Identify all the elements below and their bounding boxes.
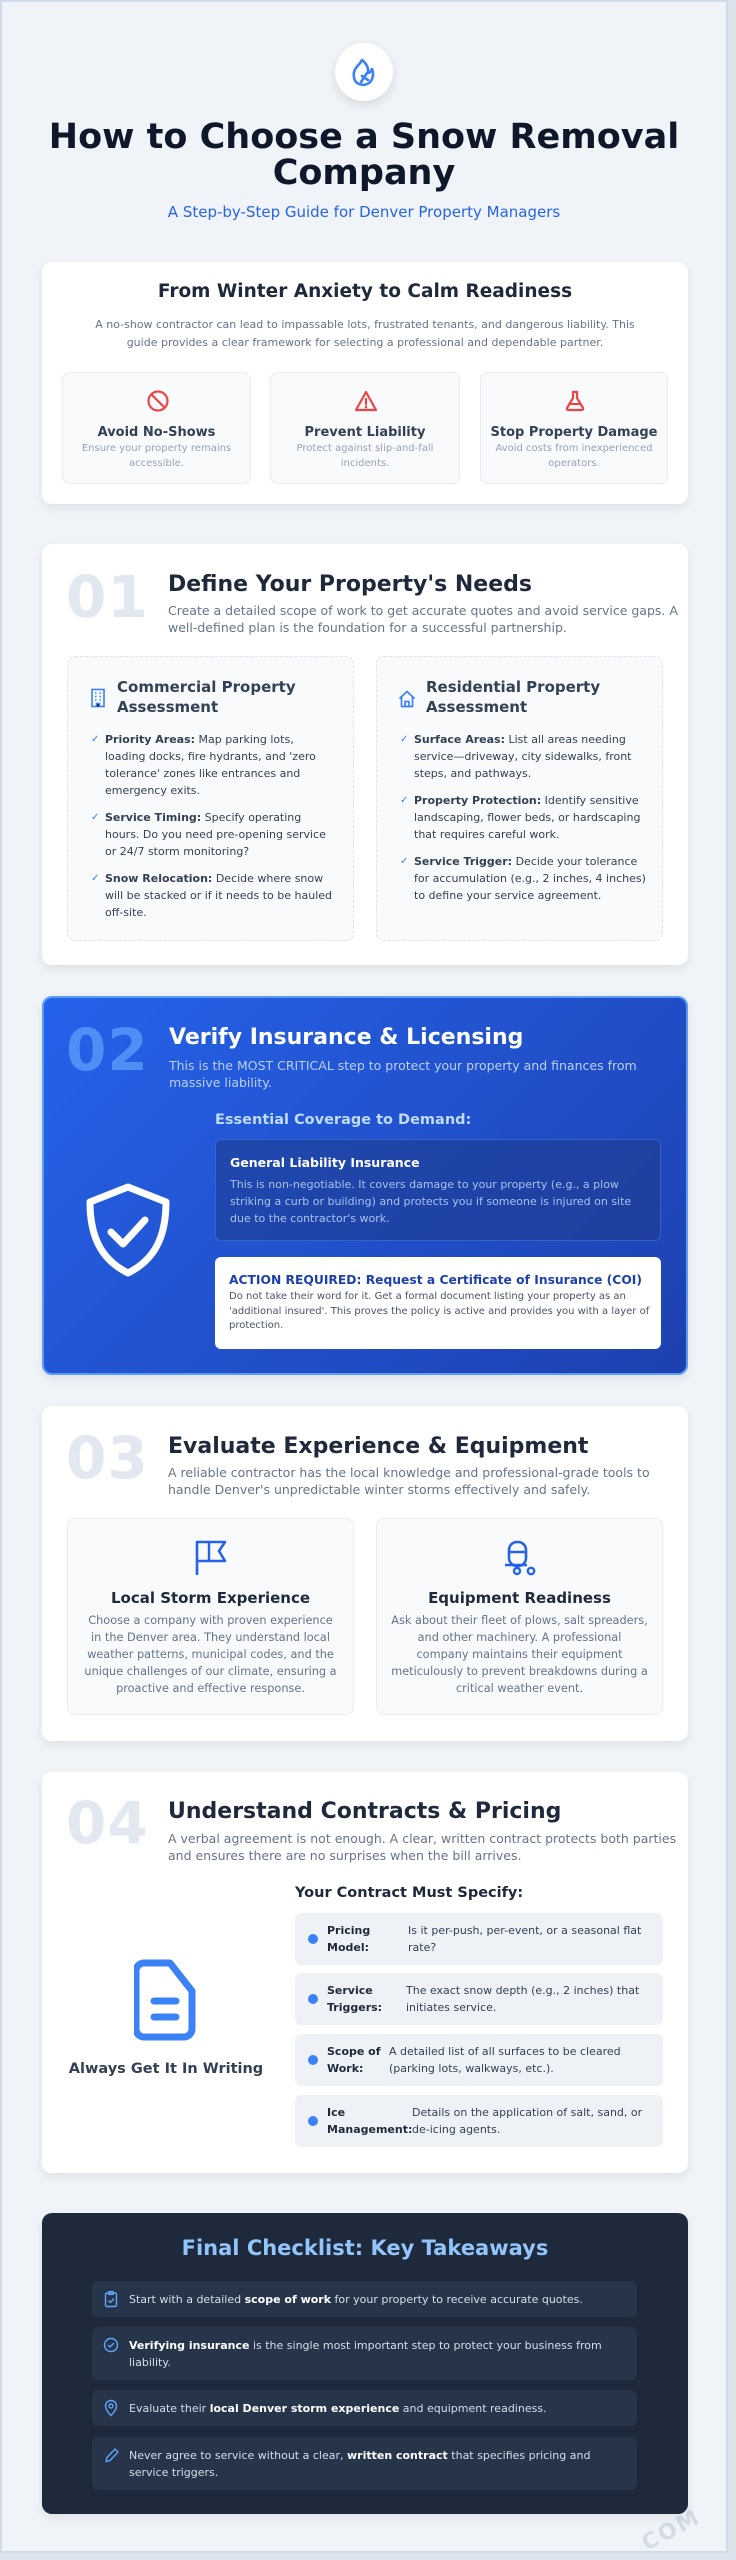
icon: snow plow xyxy=(505,1540,536,1576)
row: service triggers: The exact snow depth (e.g., 2 inches) that xyxy=(406,1984,639,1997)
card: equipment readiness: critical weather event. xyxy=(456,1682,583,1694)
row: pricing model xyxy=(295,1913,663,1965)
sub-panel: residential: service—driveway, city sidewalks, front xyxy=(414,750,632,762)
panel: step 02 xyxy=(42,996,688,1375)
row: pricing model: rate? xyxy=(408,1941,436,1954)
icon: ban xyxy=(147,390,169,412)
sub-panel: residential: ✓ xyxy=(400,856,408,866)
title: How to Choose a Snow Removal xyxy=(49,117,679,157)
label: always get it in writing: Always Get It In Writing xyxy=(69,2061,263,2077)
row: ice management xyxy=(295,2095,663,2147)
row: ice management: Details on the application of salt, sand, or xyxy=(412,2106,642,2119)
card: equipment readiness: and other machinery. A professional xyxy=(418,1630,621,1644)
mini card: no-shows: accessible. xyxy=(129,458,184,469)
takeaway 4: Never agree to service without a clear, written contract that specifies pricing and xyxy=(129,2448,590,2462)
sub-panel: commercial: ✓ xyxy=(91,812,99,822)
callout: action required: ACTION REQUIRED: Request a Certificate of Insurance (COI) xyxy=(229,1273,642,1287)
sub-panel: commercial: ✓ xyxy=(91,872,99,884)
mini card: damage xyxy=(480,372,668,484)
takeaway 4 xyxy=(92,2437,637,2490)
text: intro paragraph xyxy=(95,318,635,349)
icon: header logo xyxy=(335,43,393,101)
card: local storm experience: weather patterns, municipal codes, and the xyxy=(87,1648,334,1660)
subtitle: A Step-by-Step Guide for Denver Property Managers xyxy=(168,203,560,221)
row: service triggers: Triggers: xyxy=(327,2001,382,2014)
card: equipment readiness xyxy=(376,1518,663,1715)
sub-panel: residential xyxy=(376,656,663,941)
text: step 01 description: well-defined plan is the foundation for a successful partnership. xyxy=(168,620,567,635)
takeaway 4: service triggers. xyxy=(129,2466,218,2478)
sub-panel: residential: steps, and pathways. xyxy=(414,766,531,780)
row: scope of work: Scope of xyxy=(327,2045,381,2058)
card: local storm experience: in the Denver area. They understand local xyxy=(91,1630,330,1644)
text: step 01 description: Create a detailed scope of work to get accurate quotes and avoid service gaps. A xyxy=(168,603,678,618)
callout: action required: protection. xyxy=(229,1320,283,1331)
text: step 03 description xyxy=(168,1465,650,1497)
mini card: damage: Stop Property Damage xyxy=(491,425,657,440)
sub-panel: commercial: hours. Do you need pre-opening service xyxy=(105,828,326,840)
card: local storm experience: unique challenges of our climate, ensuring a xyxy=(84,1664,337,1678)
sub-panel: commercial xyxy=(67,656,354,941)
card: local storm experience: Local Storm Experience xyxy=(111,1589,310,1607)
panel: step 04 xyxy=(42,1772,688,2173)
sub-panel: commercial: loading docks, fire hydrants, and 'zero xyxy=(105,750,316,762)
card: equipment readiness: Equipment Readiness xyxy=(428,1589,611,1607)
icon: warning xyxy=(354,390,378,412)
heading: final checklist: Final Checklist: Key Takeaways xyxy=(182,2236,548,2260)
mini card: no-shows: Avoid No-Shows xyxy=(98,425,215,440)
icon: house xyxy=(399,690,415,708)
sub-panel: commercial: tolerance' zones like entrances and xyxy=(105,766,300,780)
sub-panel: residential: Property Protection: Identify sensitive xyxy=(414,794,639,806)
card: local storm experience: proactive and effective response. xyxy=(116,1682,305,1694)
sub-panel: residential: for accumulation (e.g., 2 inches, 4 inches) xyxy=(414,872,646,884)
sub-panel: commercial: Snow Relocation: Decide where snow xyxy=(105,872,323,884)
text: step 04 description xyxy=(168,1830,676,1862)
panel: final checklist xyxy=(42,2213,688,2514)
mini card: no-shows: Ensure your property remains xyxy=(82,443,231,454)
callout: general liability xyxy=(215,1139,661,1241)
text: step 04 description: and ensures there are no surprises when the bill arrives. xyxy=(168,1848,521,1862)
icon: document xyxy=(134,1960,196,2040)
takeaway 2: liability. xyxy=(129,2356,171,2368)
panel: step 01 xyxy=(42,544,688,965)
panel: step 03 xyxy=(42,1406,688,1741)
row: ice management: de-icing agents. xyxy=(412,2123,500,2136)
sub-panel: residential: Assessment xyxy=(426,698,527,716)
sub-panel: residential: that requires careful work. xyxy=(414,828,560,840)
number 01: 01 xyxy=(66,563,149,631)
mini card: liability: Protect against slip-and-fall xyxy=(297,443,433,454)
sub-panel: commercial: emergency exits. xyxy=(105,784,200,796)
takeaway 1: Start with a detailed scope of work for your property to receive accurate quotes. xyxy=(129,2292,583,2306)
icon: shield xyxy=(86,1184,170,1276)
sub-panel: commercial: will be stacked or if it needs to be hauled xyxy=(105,888,332,902)
card: equipment readiness: Ask about their fleet of plows, salt spreaders, xyxy=(391,1614,648,1626)
row: service triggers: initiates service. xyxy=(406,2001,496,2014)
text: intro paragraph: guide provides a clear framework for selecting a professional and dependable partner. xyxy=(127,336,603,349)
mini card: liability xyxy=(270,372,460,484)
row: pricing model: Model: xyxy=(327,1941,369,1954)
card: local storm experience xyxy=(67,1518,354,1715)
card: equipment readiness: company maintains their equipment xyxy=(416,1648,623,1660)
heading: essential coverage: Essential Coverage to Demand: xyxy=(215,1112,471,1128)
mini card: liability: incidents. xyxy=(341,458,389,469)
text: step 04 description: A verbal agreement is not enough. A clear, written contract protects both parties xyxy=(168,1830,676,1846)
heading 03: Evaluate Experience & Equipment xyxy=(168,1434,588,1459)
mini card: no-shows xyxy=(62,372,251,484)
heading: contract must specify: Your Contract Must Specify: xyxy=(295,1885,523,1901)
sub-panel: residential: ✓ xyxy=(400,794,408,806)
number 02: 02 xyxy=(66,1016,149,1084)
row: scope of work: A detailed list of all surfaces to be cleared xyxy=(389,2045,621,2058)
text: step 03 description: handle Denver's unpredictable winter storms effectively and safely. xyxy=(168,1482,590,1497)
text: step 03 description: A reliable contractor has the local knowledge and professional-grade tools to xyxy=(168,1465,650,1480)
callout: action required xyxy=(215,1257,661,1349)
row: scope of work: (parking lots, walkways, etc.). xyxy=(389,2062,554,2075)
title: Company xyxy=(273,153,455,193)
number 03: 03 xyxy=(66,1424,149,1492)
text: intro paragraph: A no-show contractor can lead to impassable lots, frustrated tenants, and dangerous liability. This xyxy=(95,318,635,331)
mini card: damage: Avoid costs from inexperienced xyxy=(495,443,653,454)
row: ice management: Management: xyxy=(327,2123,412,2136)
takeaway 2: Verifying insurance is the single most important step to protect your business from xyxy=(129,2338,602,2352)
callout: general liability: striking a curb or building) and protects you if someone is injured on site xyxy=(230,1195,631,1208)
text: step 01 description xyxy=(168,603,678,635)
sub-panel: residential: Service Trigger: Decide your tolerance xyxy=(414,854,637,868)
takeaway 3 xyxy=(92,2390,637,2426)
sub-panel: commercial: Assessment xyxy=(117,698,218,716)
text: step 02 description: This is the MOST CRITICAL step to protect your property and finances from xyxy=(169,1058,637,1072)
icon: flag xyxy=(196,1540,226,1575)
callout: action required: Do not take their word for it. Get a formal document listing your property as an xyxy=(229,1291,626,1302)
sub-panel: residential: to define your service agreement. xyxy=(414,888,601,902)
takeaway 1 xyxy=(92,2281,637,2317)
icon: flask xyxy=(566,390,584,412)
row: pricing model: Pricing xyxy=(327,1924,370,1937)
row: service triggers: Service xyxy=(327,1984,373,1997)
heading 01: Define Your Property's Needs xyxy=(168,572,532,597)
takeaway 2 xyxy=(92,2327,637,2380)
mini card: damage: operators. xyxy=(548,458,600,469)
panel: intro xyxy=(42,262,688,504)
row: service triggers xyxy=(295,1973,663,2025)
sub-panel: residential: Surface Areas: List all areas needing xyxy=(414,732,626,746)
card: equipment readiness: meticulously to prevent breakdowns during a xyxy=(391,1664,648,1678)
row: scope of work xyxy=(295,2034,663,2086)
callout: action required: 'additional insured'. This proves the policy is active and provides you with a layer of xyxy=(229,1306,649,1316)
sub-panel: residential: Residential Property xyxy=(426,678,600,696)
sub-panel: commercial: or 24/7 storm monitoring? xyxy=(105,844,249,858)
takeaway 3: Evaluate their local Denver storm experience and equipment readiness. xyxy=(129,2402,547,2414)
row: pricing model: Is it per-push, per-event, or a seasonal flat xyxy=(408,1924,641,1937)
sub-panel: commercial: Service Timing: Specify operating xyxy=(105,810,301,824)
text: step 02 description: massive liability. xyxy=(169,1074,272,1090)
sub-panel: commercial: Priority Areas: Map parking lots, xyxy=(105,732,294,746)
row: scope of work: Work: xyxy=(327,2062,363,2075)
sub-panel: commercial: Commercial Property xyxy=(117,678,296,696)
mini card: liability: Prevent Liability xyxy=(305,425,425,440)
sub-panel: residential: landscaping, flower beds, or hardscaping xyxy=(414,810,640,824)
heading 02: Verify Insurance & Licensing xyxy=(169,1025,523,1050)
row: ice management: Ice xyxy=(327,2106,345,2119)
sub-panel: residential: ✓ xyxy=(400,734,408,744)
callout: general liability: General Liability Insurance xyxy=(230,1155,420,1170)
heading 04: Understand Contracts & Pricing xyxy=(168,1799,561,1824)
text: step 02 description xyxy=(168,1058,637,1090)
sub-panel: commercial: ✓ xyxy=(91,734,99,744)
card: local storm experience: Choose a company with proven experience xyxy=(88,1614,333,1626)
callout: general liability: This is non-negotiable. It covers damage to your property (e.g., a plow xyxy=(230,1178,619,1191)
watermark: COM xyxy=(638,2505,705,2556)
title xyxy=(49,117,679,193)
heading: intro: From Winter Anxiety to Calm Readiness xyxy=(158,281,572,302)
number 04: 04 xyxy=(66,1789,149,1857)
icon: building xyxy=(91,688,105,708)
sub-panel: commercial: off-site. xyxy=(105,906,147,918)
callout: general liability: due to the contractor's work. xyxy=(230,1212,390,1225)
